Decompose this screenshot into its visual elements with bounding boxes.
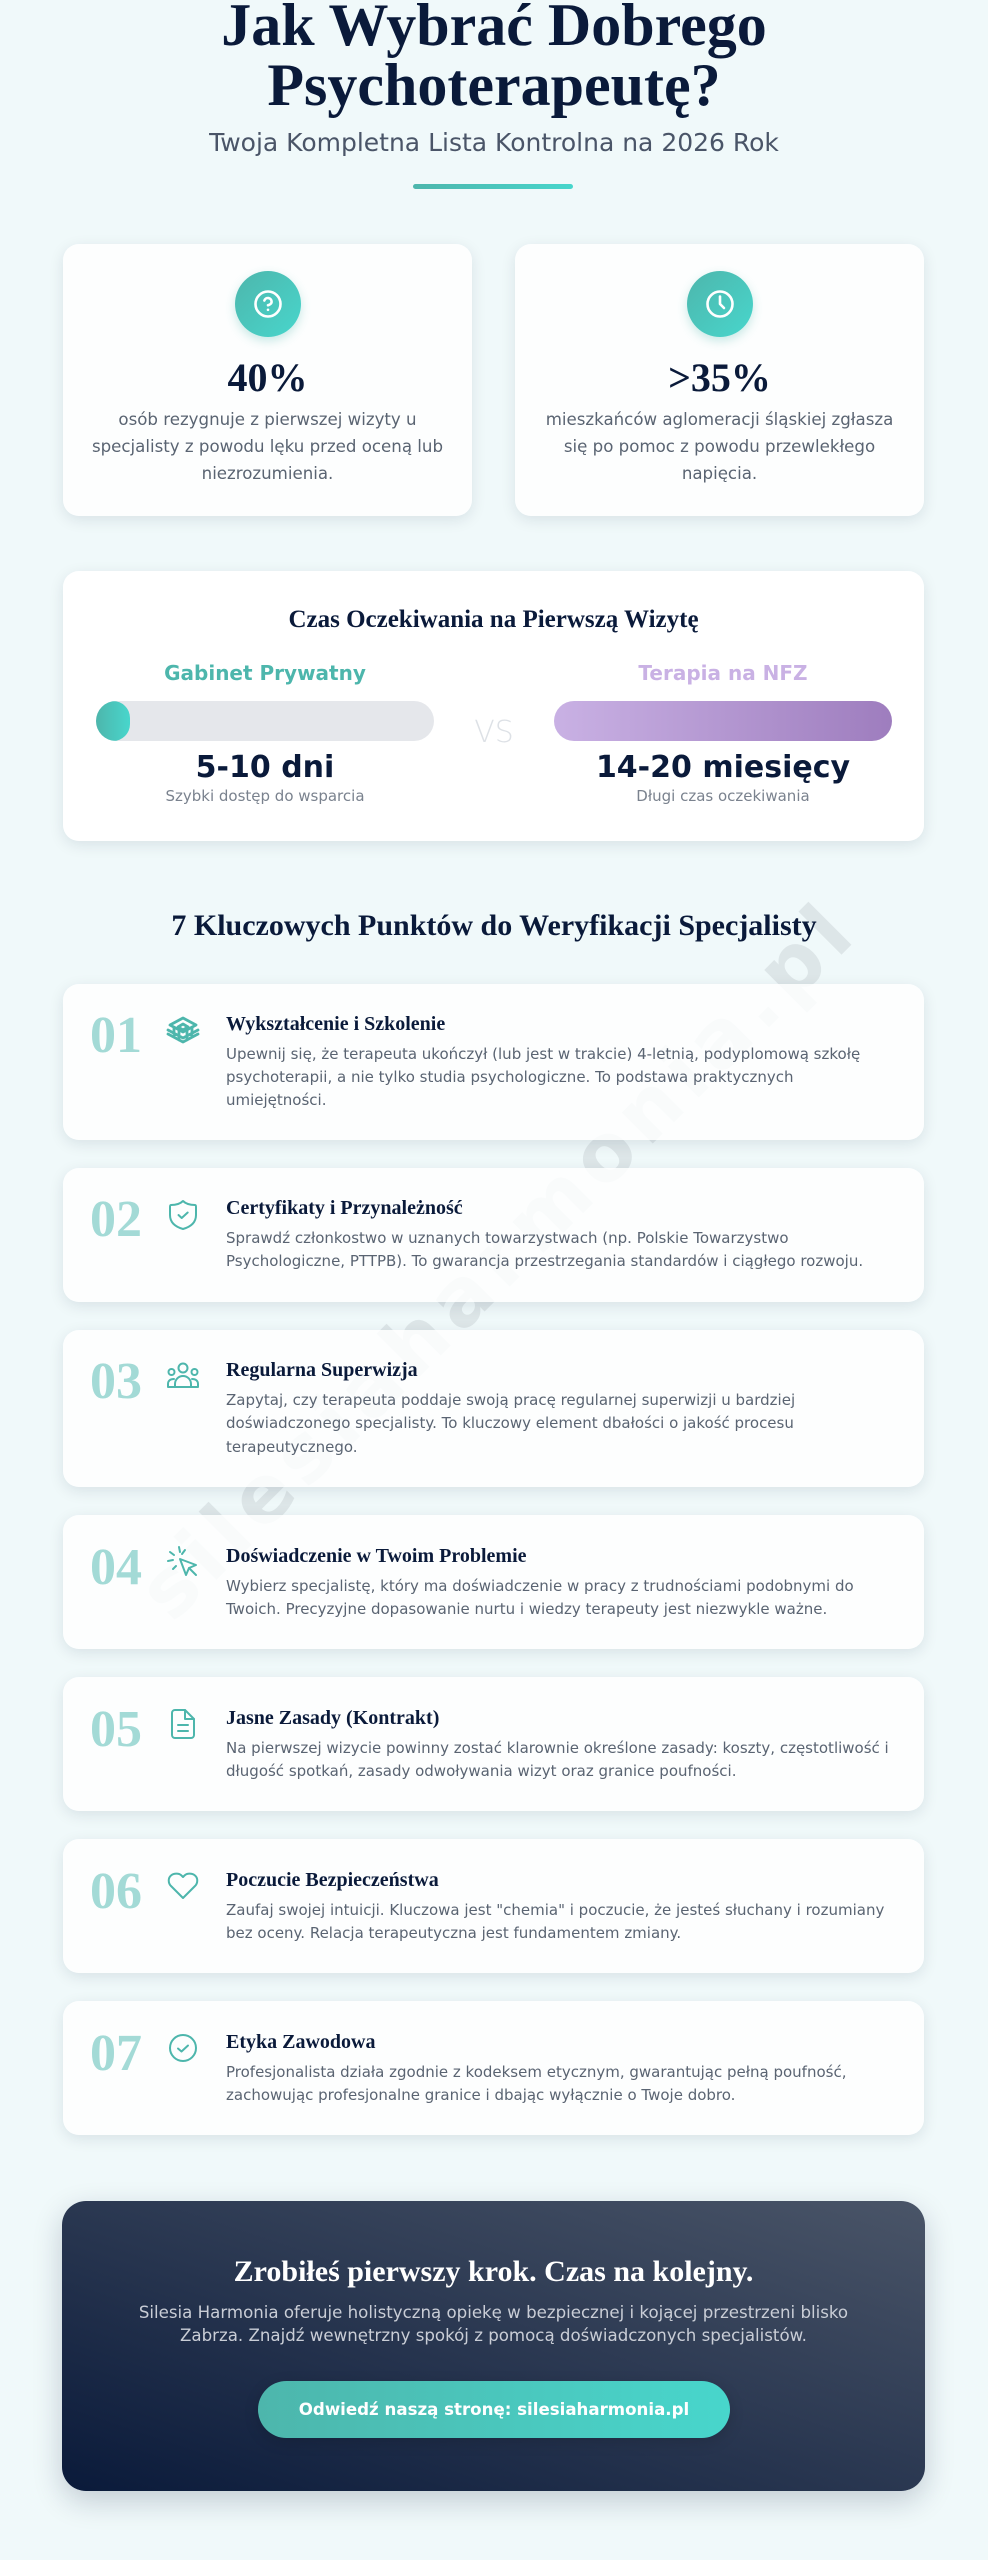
caption: Szybki dostęp do wsparcia [165, 787, 365, 805]
label: Gabinet Prywatny [164, 661, 366, 685]
item 01 [63, 984, 924, 1140]
bar [554, 701, 892, 741]
panel: stat 40% [63, 244, 472, 516]
number: 04 [90, 1539, 142, 1596]
item title: Regularna Superwizja [226, 1359, 418, 1381]
stat text: niezrozumienia. [202, 464, 333, 483]
panel: call to action [62, 2201, 925, 2491]
item title: Wykształcenie i Szkolenie [226, 1012, 445, 1034]
vs label: VS [474, 715, 514, 750]
item text: psychoterapii, a nie tylko studia psychologiczne. To podstawa praktycznych [226, 1068, 794, 1086]
value: 5-10 dni [196, 750, 334, 785]
section heading: 7 Kluczowych Punktów do Weryfikacji Specjalisty [171, 909, 817, 942]
stat number: 40% [228, 355, 308, 400]
item 03 [63, 1330, 924, 1487]
item title: Certyfikaty i Przynależność [226, 1197, 463, 1219]
subtitle: Twoja Kompletna Lista Kontrolna na 2026 Rok [209, 128, 779, 156]
icon: check circle [169, 2034, 197, 2062]
value: 14-20 miesięcy [596, 750, 850, 785]
icon: question [234, 270, 300, 336]
icon: people [167, 1362, 199, 1388]
label: Terapia na NFZ [638, 661, 808, 685]
cta heading: Zrobiłeś pierwszy krok. Czas na kolejny. [234, 2255, 753, 2288]
item text: Psychologiczne, PTTPB). To gwarancja przestrzegania standardów i ciągłego rozwoju. [226, 1252, 863, 1270]
item 07 [63, 2000, 924, 2134]
stat text [546, 410, 893, 483]
cta text: Zabrza. Znajdź wewnętrzny spokój z pomocą doświadczonych specjalistów. [180, 2326, 807, 2345]
icon: clock [686, 270, 752, 336]
panel: stat 35% [515, 244, 924, 516]
item text: doświadczonego specjalisty. To kluczowy element dbałości o jakość procesu [226, 1414, 794, 1432]
item text: zachowując profesjonalne granice i dbając wyłącznie o Twoje dobro. [226, 2086, 735, 2104]
item title: Jasne Zasady (Kontrakt) [226, 1707, 439, 1729]
item text: Na pierwszej wizycie powinny zostać klarownie określone zasady: koszty, częstotliwość i [226, 1739, 889, 1757]
panel heading: Czas Oczekiwania na Pierwszą Wizytę [288, 606, 699, 633]
item text: umiejętności. [226, 1091, 326, 1109]
number: 06 [90, 1863, 142, 1920]
cta text [139, 2303, 848, 2345]
caption: Długi czas oczekiwania [636, 787, 810, 805]
item text [226, 1229, 863, 1270]
stat text: specjalisty z powodu lęku przed oceną lub [92, 437, 443, 456]
column: private practice [96, 661, 434, 805]
stat text: osób rezygnuje z pierwszej wizyty u [118, 410, 417, 429]
item 02 [63, 1168, 924, 1302]
item title: Poczucie Bezpieczeństwa [226, 1869, 439, 1891]
divider [413, 184, 573, 189]
item 05 [63, 1676, 924, 1810]
icon: pointer [167, 1546, 197, 1576]
icon: document [171, 1709, 195, 1739]
panel: waiting time comparison [63, 571, 924, 841]
title [221, 0, 767, 118]
bar track and fill [96, 701, 434, 741]
cta text: Silesia Harmonia oferuje holistyczną opiekę w bezpiecznej i kojącej przestrzeni blisko [139, 2303, 848, 2322]
item 04 [63, 1514, 924, 1648]
number: 02 [90, 1191, 142, 1248]
number: 07 [90, 2025, 142, 2082]
item text: Sprawdź członkostwo w uznanych towarzystwach (np. Polskie Towarzystwo [226, 1229, 789, 1247]
item text: Zapytaj, czy terapeuta poddaje swoją pracę regularnej superwizji u bardziej [226, 1391, 795, 1409]
stat text: się po pomoc z powodu przewlekłego [564, 437, 875, 456]
item text: Profesjonalista działa zgodnie z kodeksem etycznym, gwarantując pełną poufność, [226, 2063, 846, 2081]
number: 01 [90, 1006, 142, 1064]
stat text: mieszkańców aglomeracji śląskiej zgłasza [546, 410, 893, 429]
item title: Etyka Zawodowa [226, 2031, 375, 2053]
item text [226, 1901, 884, 1942]
item text [226, 1044, 860, 1109]
icon: graduation [166, 1016, 200, 1044]
icon: heart [168, 1872, 198, 1899]
stat text: napięcia. [682, 464, 757, 483]
number: 03 [90, 1353, 142, 1410]
column: NFZ [554, 661, 892, 805]
item text: Upewnij się, że terapeuta ukończył (lub jest w trakcie) 4-letnią, podyplomową szkołę [226, 1044, 860, 1062]
item 06 [63, 1838, 924, 1972]
cta button [258, 2381, 730, 2438]
watermark: silesiaharmonia.pl [120, 882, 875, 1637]
item text: długość spotkań, zasady odwoływania wizyt oraz granice poufności. [226, 1762, 736, 1780]
item text [226, 1739, 889, 1780]
item text: terapeutycznego. [226, 1438, 358, 1456]
stat number: >35% [668, 355, 771, 400]
title: Psychoterapeutę? [267, 52, 721, 118]
item text: Twoich. Precyzyjne dopasowanie nurtu i wiedzy terapeuty jest niezwykle ważne. [226, 1600, 827, 1618]
cta button: Odwiedź naszą stronę: silesiaharmonia.pl [299, 2400, 689, 2419]
item text: Wybierz specjalistę, który ma doświadczenie w pracy z trudnościami podobnymi do [226, 1577, 854, 1595]
stat text [92, 410, 443, 483]
item text: Zaufaj swojej intuicji. Kluczowa jest "chemia" i poczucie, że jesteś słuchany i rozumiany [226, 1901, 884, 1919]
number: 05 [90, 1701, 142, 1758]
item text: bez oceny. Relacja terapeutyczna jest fundamentem zmiany. [226, 1924, 681, 1942]
item text [226, 1577, 854, 1618]
item text [226, 1391, 795, 1456]
item title: Doświadczenie w Twoim Problemie [226, 1545, 527, 1567]
icon: shield [169, 1200, 197, 1230]
item text [226, 2063, 846, 2104]
